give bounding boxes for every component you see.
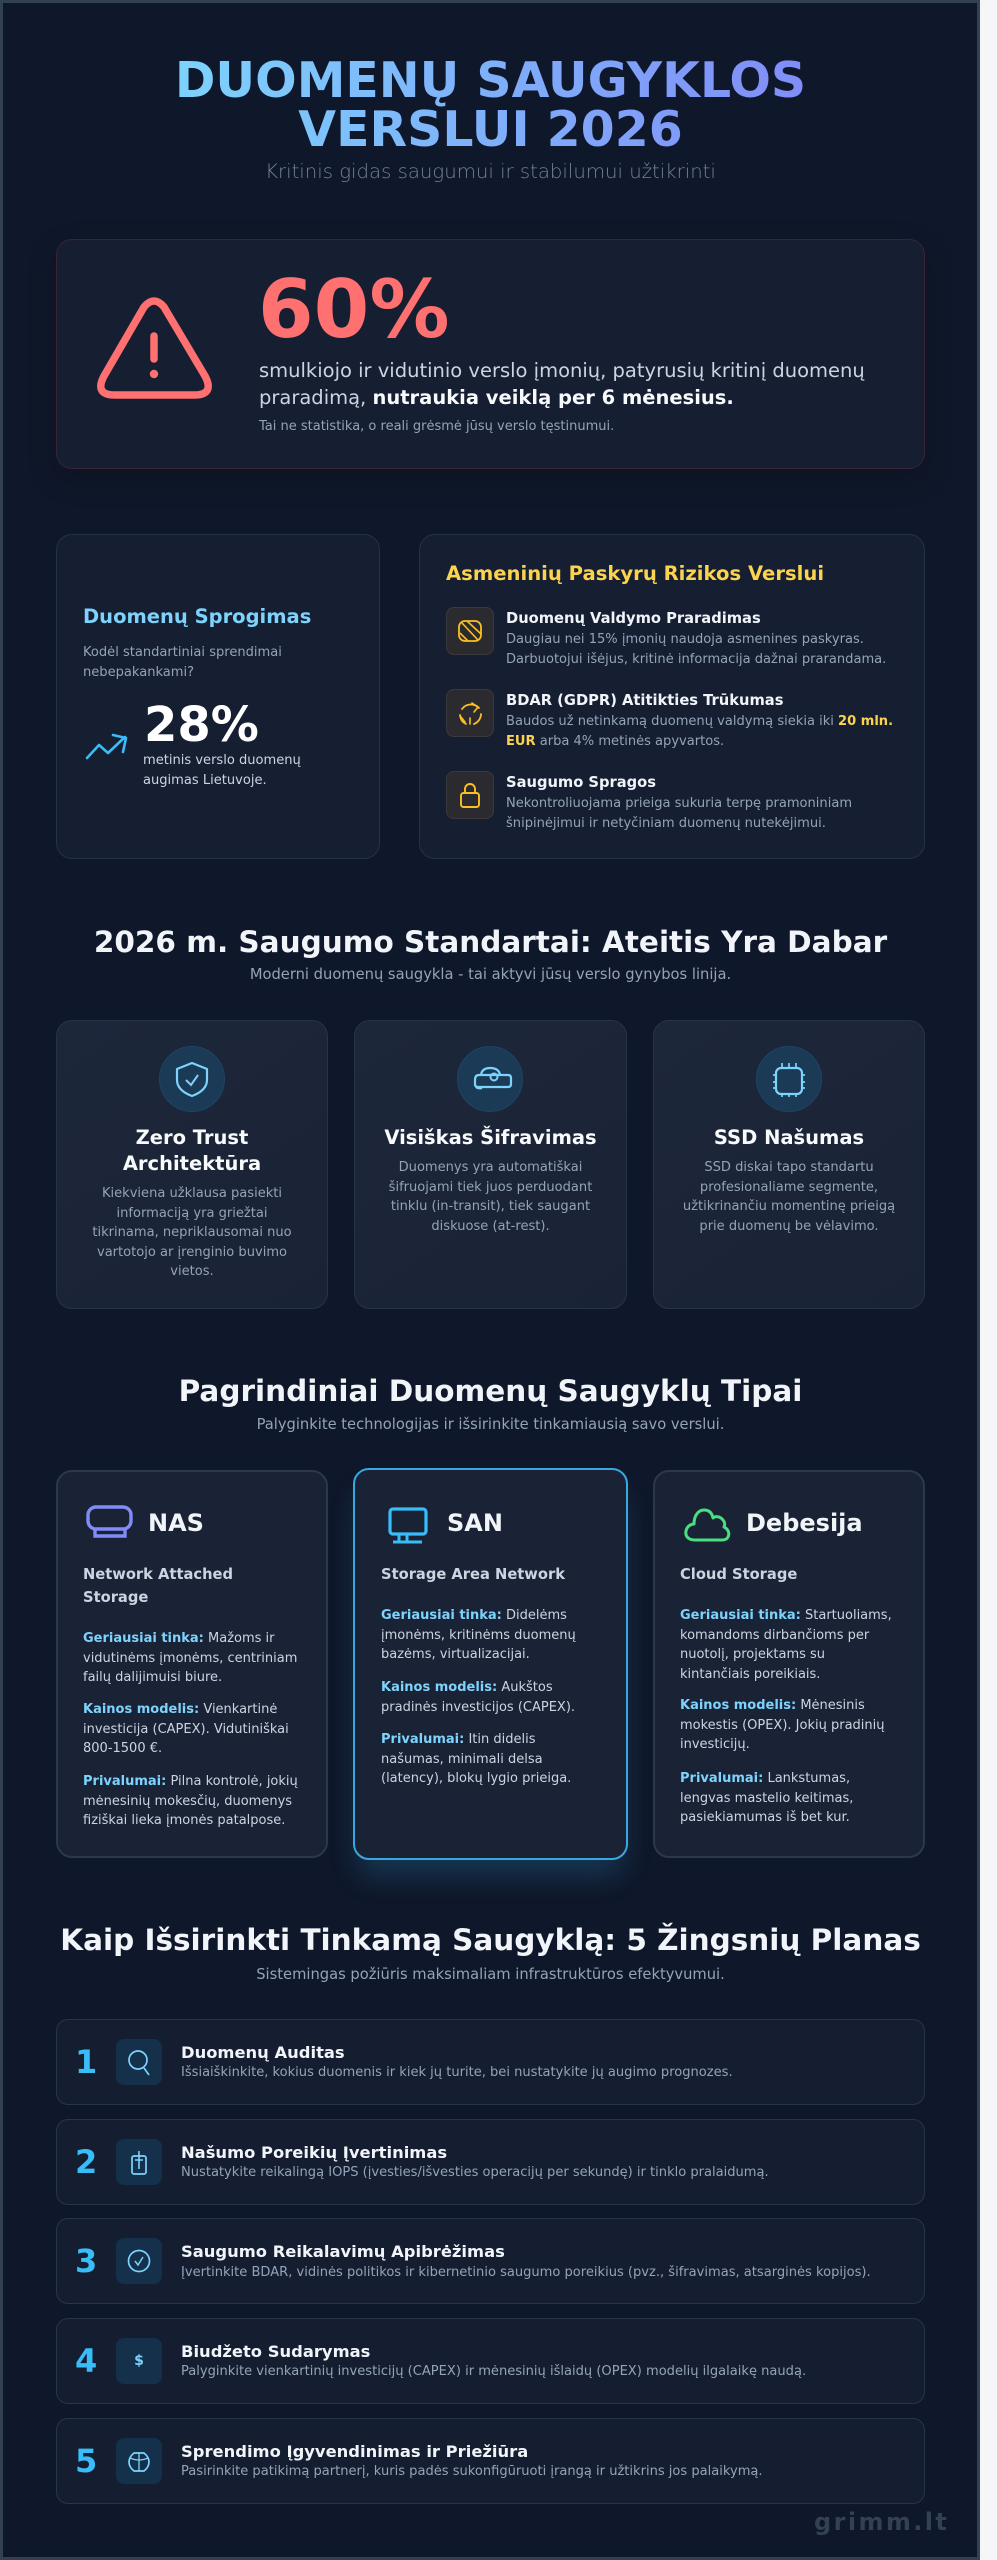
statistic caption [143, 753, 301, 788]
text: NAS advantages: fiziškai lieka įmonės patalpose. [83, 1813, 285, 1828]
risk 2 text [506, 714, 893, 748]
title: DUOMENŲ SAUGYKLOS [175, 52, 806, 109]
text: zero trust: vartotojo ar įrenginio buvimo [97, 1244, 287, 1260]
statistic caption: augimas Lietuvoje. [143, 772, 267, 788]
text: SAN best for: įmonėms, kritinėms duomenų [381, 1628, 576, 1642]
heading: data explosion: Duomenų Sprogimas [83, 605, 311, 628]
panel: step 5 [56, 2418, 925, 2504]
text: why standard solutions fail: nebepakankami? [83, 664, 194, 680]
heading: 5 step plan: Kaip Išsirinkti Tinkamą Saugyklą: 5 Žingsnių Planas [60, 1923, 921, 1957]
icon: compliance cycle [446, 689, 494, 737]
panel: SAN highlighted [353, 1468, 628, 1860]
panel: NAS [56, 1470, 328, 1858]
title: VERSLUI 2026 [298, 101, 683, 158]
title: zero trust [123, 1126, 261, 1175]
step 1 text: Išsiaiškinkite, kokius duomenis ir kiek jų turite, bei nustatykite jų augimo prognozes. [181, 2065, 733, 2080]
panel: 60% hero statistic [56, 239, 925, 469]
icon: shield [159, 1046, 225, 1112]
risk 3 title: Saugumo Spragos [506, 774, 656, 791]
step 4 title: Biudžeto Sudarymas [181, 2342, 370, 2361]
text: cloud pricing: investicijų. [680, 1737, 750, 1752]
icon: dollar: $ [134, 2353, 144, 2369]
text: NAS pricing [83, 1702, 289, 1756]
text: SAN advantages: (latency), blokų lygio prieiga. [381, 1771, 571, 1786]
panel: zero trust [56, 1020, 328, 1309]
statistic caption: metinis verslo duomenų [143, 753, 301, 768]
step 2 text: Nustatykite reikalingą IOPS (įvesties/išvesties operacijų per sekundę) ir tinklo pralaidumą. [181, 2165, 769, 2180]
text: encryption: tinklu (in-transit), tiek saugant [391, 1199, 590, 1214]
icon: data control loss [446, 607, 494, 655]
title: zero trust: Architektūra [123, 1152, 261, 1175]
panel: personal account risks [419, 534, 925, 859]
text: SSD: prie duomenų be vėlavimo. [699, 1218, 879, 1234]
number 4: 4 [75, 2342, 97, 2380]
risk 1 text: Daugiau nei 15% įmonių naudoja asmenines paskyras. [506, 632, 864, 647]
subheading: security standards: Moderni duomenų saugykla - tai aktyvi jūsų verslo gynybos linija. [250, 966, 731, 983]
risk 3 text: Nekontroliuojama prieiga sukuria terpę pramoniniam [506, 796, 852, 811]
hero note: Tai ne statistika, o reali grėsmė jūsų verslo tęstinumui. [259, 419, 614, 434]
panel: step 2 [56, 2119, 925, 2205]
text: zero trust: tikrinama, nepriklausomai nuo [92, 1225, 292, 1240]
heading: personal account risks: Asmeninių Paskyrų Rizikos Verslui [446, 562, 824, 585]
text: SSD: profesionaliame segmente, [700, 1180, 878, 1194]
subheading: storage types: Palyginkite technologijas ir išsirinkite tinkamiausią savo verslui. [257, 1416, 724, 1433]
icon: chip [756, 1046, 822, 1112]
number 3: 3 [75, 2242, 97, 2280]
text: cloud pricing [680, 1698, 884, 1752]
text: NAS advantages: mėnesinių mokesčių, duomenys [83, 1794, 292, 1808]
title: encryption: Visiškas Šifravimas [384, 1126, 597, 1149]
step 5 title: Sprendimo Įgyvendinimas ir Priežiūra [181, 2442, 528, 2461]
text: cloud pricing: Kainos modelis: Mėnesinis [680, 1698, 865, 1713]
text: encryption: šifruojami tiek juos perduodant [389, 1180, 592, 1194]
text: cloud best for [680, 1608, 892, 1682]
text: NAS pricing: investicija (CAPEX). Vidutiniškai [83, 1722, 289, 1736]
text: encryption [389, 1160, 592, 1234]
icon: check circle [116, 2238, 162, 2284]
icon: lock [446, 771, 494, 819]
number 1: 1 [75, 2043, 97, 2081]
hero description [259, 359, 865, 409]
heading: storage types: Pagrindiniai Duomenų Saugyklų Tipai [179, 1374, 802, 1408]
text: NAS pricing: Kainos modelis: Vienkartinė [83, 1702, 277, 1717]
text: NAS best for [83, 1631, 297, 1685]
text: NAS pricing: 800-1500 €. [83, 1741, 162, 1756]
icon: encrypted cloud [457, 1046, 523, 1112]
number 2: 2 [75, 2143, 97, 2181]
text: SAN best for: bazėms, virtualizacijai. [381, 1647, 530, 1662]
title: zero trust: Zero Trust [136, 1126, 248, 1149]
step 4 text: Palyginkite vienkartinių investicijų (CAPEX) ir mėnesinių išlaidų (OPEX) modelių ilgalaikę naudą. [181, 2364, 806, 2379]
title: SAN: SAN [447, 1509, 503, 1537]
text: zero trust: vietos. [170, 1264, 214, 1279]
text: why standard solutions fail [83, 645, 282, 680]
icon: NAS device [86, 1505, 133, 1538]
step 3 text: Įvertinkite BDAR, vidinės politikos ir kibernetinio saugumo poreikius (pvz., šifravimas, atsarginės kopijos). [181, 2265, 871, 2280]
subtitle: NAS [83, 1566, 233, 1606]
heading: security standards: 2026 m. Saugumo Standartai: Ateitis Yra Dabar [94, 925, 887, 959]
panel: step 1 [56, 2019, 925, 2105]
title: SSD: SSD Našumas [714, 1126, 864, 1149]
icon: maintenance [116, 2438, 162, 2484]
panel: SSD [653, 1020, 925, 1309]
text: SAN advantages [381, 1732, 571, 1786]
step 2 title: Našumo Poreikių Įvertinimas [181, 2143, 447, 2162]
risk 3 text [506, 796, 852, 830]
text: cloud best for: kintančiais poreikiais. [680, 1666, 820, 1682]
risk 1 title: Duomenų Valdymo Praradimas [506, 610, 761, 627]
risk 2 text: Baudos už netinkamą duomenų valdymą siekia iki 20 mln. [506, 714, 893, 729]
text: cloud advantages: Privalumai: Lankstumas, [680, 1771, 850, 1786]
text: NAS best for: Geriausiai tinka: Mažoms ir [83, 1631, 274, 1646]
risk 1 text [506, 632, 886, 666]
subtitle: Kritinis gidas saugumui ir stabilumui užtikrinti [265, 160, 716, 183]
step 1 title: Duomenų Auditas [181, 2043, 345, 2062]
text: SAN best for: Geriausiai tinka: Didelėms [381, 1608, 567, 1623]
step 3 title: Saugumo Reikalavimų Apibrėžimas [181, 2242, 505, 2261]
text: SSD: SSD diskai tapo standartu [704, 1160, 874, 1175]
icon: performance [116, 2139, 162, 2185]
risk 3 text: šnipinėjimui ir netyčiniam duomenų nutekėjimui. [506, 816, 826, 830]
title: NAS: NAS [148, 1509, 204, 1537]
text: NAS best for: vidutinėms įmonėms, centriniam [83, 1650, 297, 1666]
text: SAN pricing: pradinės investicijos (CAPEX). [381, 1700, 575, 1714]
text: cloud best for: nuotolį, projektams su [680, 1647, 825, 1662]
title: cloud: Debesija [746, 1509, 863, 1537]
text: SAN advantages: Privalumai: Itin didelis [381, 1732, 536, 1747]
text: cloud advantages [680, 1771, 853, 1825]
text: encryption: Duomenys yra automatiškai [399, 1160, 582, 1175]
text: cloud advantages: pasiekiamumas iš bet kur. [680, 1810, 850, 1825]
text: SSD: užtikrinančiu momentinę prieigą [683, 1199, 895, 1214]
text: encryption: diskuose (at-rest). [431, 1218, 550, 1234]
step 5 text: Pasirinkite patikimą partnerį, kuris padės sukonfigūruoti įrangą ir užtikrins jos palaikymą. [181, 2464, 763, 2479]
icon: cloud [684, 1508, 730, 1542]
panel: encryption [354, 1020, 627, 1309]
risk 2 text: EUR arba 4% metinės apyvartos. [506, 734, 724, 748]
text: why standard solutions fail: Kodėl standartiniai sprendimai [83, 645, 282, 660]
panel: step 4 [56, 2318, 925, 2404]
text: cloud pricing: mokestis (OPEX). Jokių pradinių [680, 1718, 884, 1732]
risk 1 text: Darbuotojui išėjus, kritinė informacija dažnai prarandama. [506, 652, 886, 666]
text: SAN advantages: našumas, minimali delsa [381, 1752, 543, 1766]
text: SAN pricing: Kainos modelis: Aukštos [381, 1680, 553, 1695]
subtitle: NAS: Storage [83, 1589, 148, 1606]
icon: dollar [116, 2338, 162, 2384]
icon: warning triangle [97, 297, 212, 399]
text: cloud best for: Geriausiai tinka: Startuoliams, [680, 1608, 892, 1623]
panel: cloud [653, 1470, 925, 1858]
title [170, 56, 811, 154]
subtitle: cloud: Cloud Storage [680, 1566, 797, 1583]
number 5: 5 [75, 2442, 97, 2480]
text: NAS best for: failų dalijimuisi biure. [83, 1670, 222, 1685]
hero description: praradimą, nutraukia veiklą per 6 mėnesius. [259, 386, 734, 409]
hero number: 60% [258, 263, 449, 356]
subtitle: SAN: Storage Area Network [381, 1566, 565, 1583]
text: cloud advantages: lengvas mastelio keitimas, [680, 1790, 853, 1806]
statistic: 28%: 28% [144, 697, 259, 753]
panel: step 3 [56, 2218, 925, 2304]
icon: SAN monitor [388, 1507, 428, 1544]
hero description: smulkiojo ir vidutinio verslo įmonių, patyrusių kritinį duomenų [259, 359, 865, 382]
icon: magnifier [116, 2039, 162, 2085]
text: SSD [683, 1160, 895, 1234]
text: zero trust: informaciją yra griežtai [116, 1206, 267, 1220]
watermark: grimm.lt [814, 2508, 949, 2536]
text: SAN pricing [381, 1680, 575, 1714]
text: zero trust: Kiekviena užklausa pasiekti [102, 1186, 282, 1201]
text: zero trust [92, 1186, 292, 1279]
subheading: 5 step plan: Sistemingas požiūris maksimaliam infrastruktūros efektyvumui. [256, 1966, 725, 1983]
icon: trend arrow [86, 734, 128, 760]
text: SAN best for [381, 1608, 576, 1662]
panel: data explosion [56, 534, 380, 859]
text: NAS advantages [83, 1774, 298, 1828]
text: cloud best for: komandoms dirbančioms per [680, 1628, 869, 1642]
text: NAS advantages: Privalumai: Pilna kontrolė, jokių [83, 1774, 298, 1789]
subtitle: NAS: Network Attached [83, 1566, 233, 1583]
risk 2 title: BDAR (GDPR) Atitikties Trūkumas [506, 692, 783, 709]
